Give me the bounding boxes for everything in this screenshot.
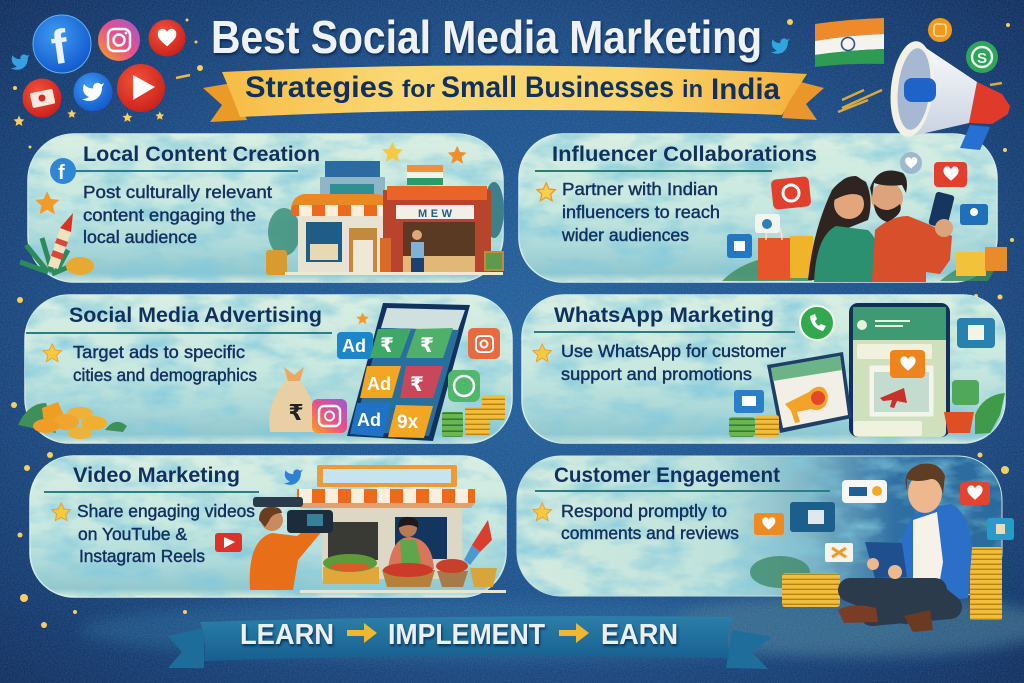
icon: whatsapp bubble xyxy=(800,306,834,340)
banner text: EARN xyxy=(601,619,678,651)
arrow xyxy=(347,623,377,643)
title: Best Social Media Marketing xyxy=(211,11,762,63)
icon: star xyxy=(533,503,552,521)
illustration: man with tablet and coins xyxy=(782,464,1002,632)
icon: rocket and plants xyxy=(20,213,94,275)
bubble: white envelope xyxy=(825,543,853,562)
rocket xyxy=(464,520,492,565)
icon: star xyxy=(43,344,62,362)
bubble: orange heart xyxy=(754,513,784,535)
subtitle text: Strategies xyxy=(245,71,394,104)
body text xyxy=(83,182,272,247)
panel: video marketing xyxy=(30,456,506,597)
illustration: phone with ad tiles: ₹ xyxy=(420,335,434,357)
subtitle text: Small xyxy=(441,71,517,104)
social bubbles xyxy=(771,176,811,210)
icon: blue bubble xyxy=(734,390,764,413)
trees xyxy=(750,556,810,588)
jacket xyxy=(897,504,972,606)
heading: Video Marketing xyxy=(73,463,240,487)
icon: firework star xyxy=(35,191,59,214)
illustration: phone with ad tiles: ₹ xyxy=(380,335,394,357)
icon: blue tile xyxy=(957,318,995,348)
icon: star xyxy=(52,503,71,521)
icon: twitter xyxy=(284,469,303,485)
bubble: navy xyxy=(790,502,835,532)
illustration: couple xyxy=(722,152,1007,282)
icon: gold star xyxy=(382,142,403,162)
heading: WhatsApp Marketing xyxy=(554,303,774,327)
banner text: IMPLEMENT xyxy=(388,619,545,651)
banner text xyxy=(240,619,678,651)
icon: heart bubble xyxy=(890,350,925,378)
shopping bags xyxy=(758,225,813,280)
illustration: shops: MEW xyxy=(418,208,453,220)
bottom banner xyxy=(168,616,772,669)
illustration: money bag xyxy=(269,367,315,432)
body text: Share engaging videos xyxy=(77,501,255,521)
engagement bubbles xyxy=(754,480,1014,562)
icon: instagram xyxy=(312,399,347,433)
subtitle text: India xyxy=(711,73,780,106)
illustration: shops xyxy=(266,161,504,275)
social icons cluster xyxy=(11,15,185,118)
panel: customer engagement xyxy=(517,456,1002,596)
panel: influencer collaborations xyxy=(519,134,1007,282)
heading: Local Content Creation xyxy=(83,142,320,166)
body text xyxy=(561,179,720,245)
panel: local content creation xyxy=(20,134,504,282)
body text xyxy=(561,341,786,384)
body text: content engaging the xyxy=(83,205,256,225)
body text: Respond promptly to xyxy=(561,501,727,521)
icon: small twitter xyxy=(11,54,30,70)
panel: social media advertising xyxy=(18,295,512,443)
illustration: tablet with megaphone xyxy=(767,352,852,433)
icon: green badge xyxy=(966,41,998,73)
icon: twitter near title xyxy=(771,38,790,54)
illustration: phone with ad tiles: ₹ xyxy=(410,374,424,396)
heading: Customer Engagement xyxy=(554,463,780,487)
illustration: cameraman xyxy=(250,497,333,590)
vendor xyxy=(388,517,434,569)
icon: star xyxy=(537,183,556,201)
body text: Target ads to specific xyxy=(73,342,245,362)
body text: on YouTube & xyxy=(78,524,187,544)
illustration: phone with ad tiles: Ad xyxy=(357,410,381,430)
subtitle ribbon xyxy=(203,65,824,122)
icon: play xyxy=(117,64,165,112)
icon: facebook bubble: f xyxy=(58,162,65,184)
illustration: phone with ad tiles xyxy=(337,303,470,441)
tablet xyxy=(865,542,907,578)
icon: instagram xyxy=(98,19,140,61)
coin stacks xyxy=(729,415,779,437)
subtitle text: for xyxy=(402,76,435,103)
icon: star xyxy=(533,344,552,362)
icon: facebook: f xyxy=(48,20,72,75)
body text: Partner with Indian xyxy=(562,179,718,199)
bubble: white chat xyxy=(842,480,887,503)
illustration: phone with ad tiles: Ad xyxy=(342,336,366,356)
ground line xyxy=(300,590,506,593)
banner text: LEARN xyxy=(240,619,334,651)
shoes xyxy=(838,605,878,623)
bubble: red heart xyxy=(960,482,990,505)
subtitle text: in xyxy=(682,76,703,103)
body text: cities and demographics xyxy=(73,365,257,385)
illustration: potted plant xyxy=(944,380,1005,434)
subtitle text: Businesses xyxy=(525,71,674,104)
body text: influencers to reach xyxy=(562,202,720,222)
body text: Instagram Reels xyxy=(79,546,205,566)
body text: wider audiences xyxy=(561,225,689,245)
icon: youtube small xyxy=(22,78,62,118)
icon: orange badge xyxy=(928,18,952,42)
icon: whatsapp tile xyxy=(448,370,480,402)
icon: orange burst xyxy=(448,146,467,164)
icon: facebook bubble xyxy=(50,158,76,184)
illustration: market stall xyxy=(297,465,497,587)
heading: Influencer Collaborations xyxy=(552,142,817,166)
icon: twitter xyxy=(74,72,112,112)
icon: youtube xyxy=(215,533,242,552)
illustration: phone with ad tiles: Ad xyxy=(367,374,391,394)
panel: whatsapp marketing xyxy=(522,295,1005,443)
head xyxy=(908,473,942,513)
heading: Social Media Advertising xyxy=(69,303,322,327)
body text xyxy=(77,501,255,566)
illustration: coins and plants xyxy=(18,402,127,439)
arrow xyxy=(559,623,589,643)
body text xyxy=(561,501,739,543)
icon: heart xyxy=(148,20,186,56)
illustration: phone xyxy=(849,303,950,437)
illustration: money bag: ₹ xyxy=(288,400,304,425)
icon: green badge: S xyxy=(977,50,987,67)
icon: orange star xyxy=(357,313,369,324)
bubble: teal xyxy=(987,518,1014,540)
body text xyxy=(73,342,257,385)
body text: Use WhatsApp for customer xyxy=(561,341,786,361)
produce xyxy=(323,554,497,587)
body text: support and promotions xyxy=(561,364,752,384)
body text: Post culturally relevant xyxy=(83,182,272,202)
subtitle text xyxy=(245,71,780,106)
icon: instagram tile xyxy=(468,328,500,359)
coin stacks xyxy=(442,395,505,437)
body text: local audience xyxy=(83,227,197,247)
illustration: phone with ad tiles: 9x xyxy=(397,412,419,433)
body text: comments and reviews xyxy=(561,523,739,543)
icon: india flag xyxy=(815,18,884,67)
legs xyxy=(850,590,950,614)
megaphone xyxy=(886,39,1010,150)
icon: facebook xyxy=(33,15,91,75)
